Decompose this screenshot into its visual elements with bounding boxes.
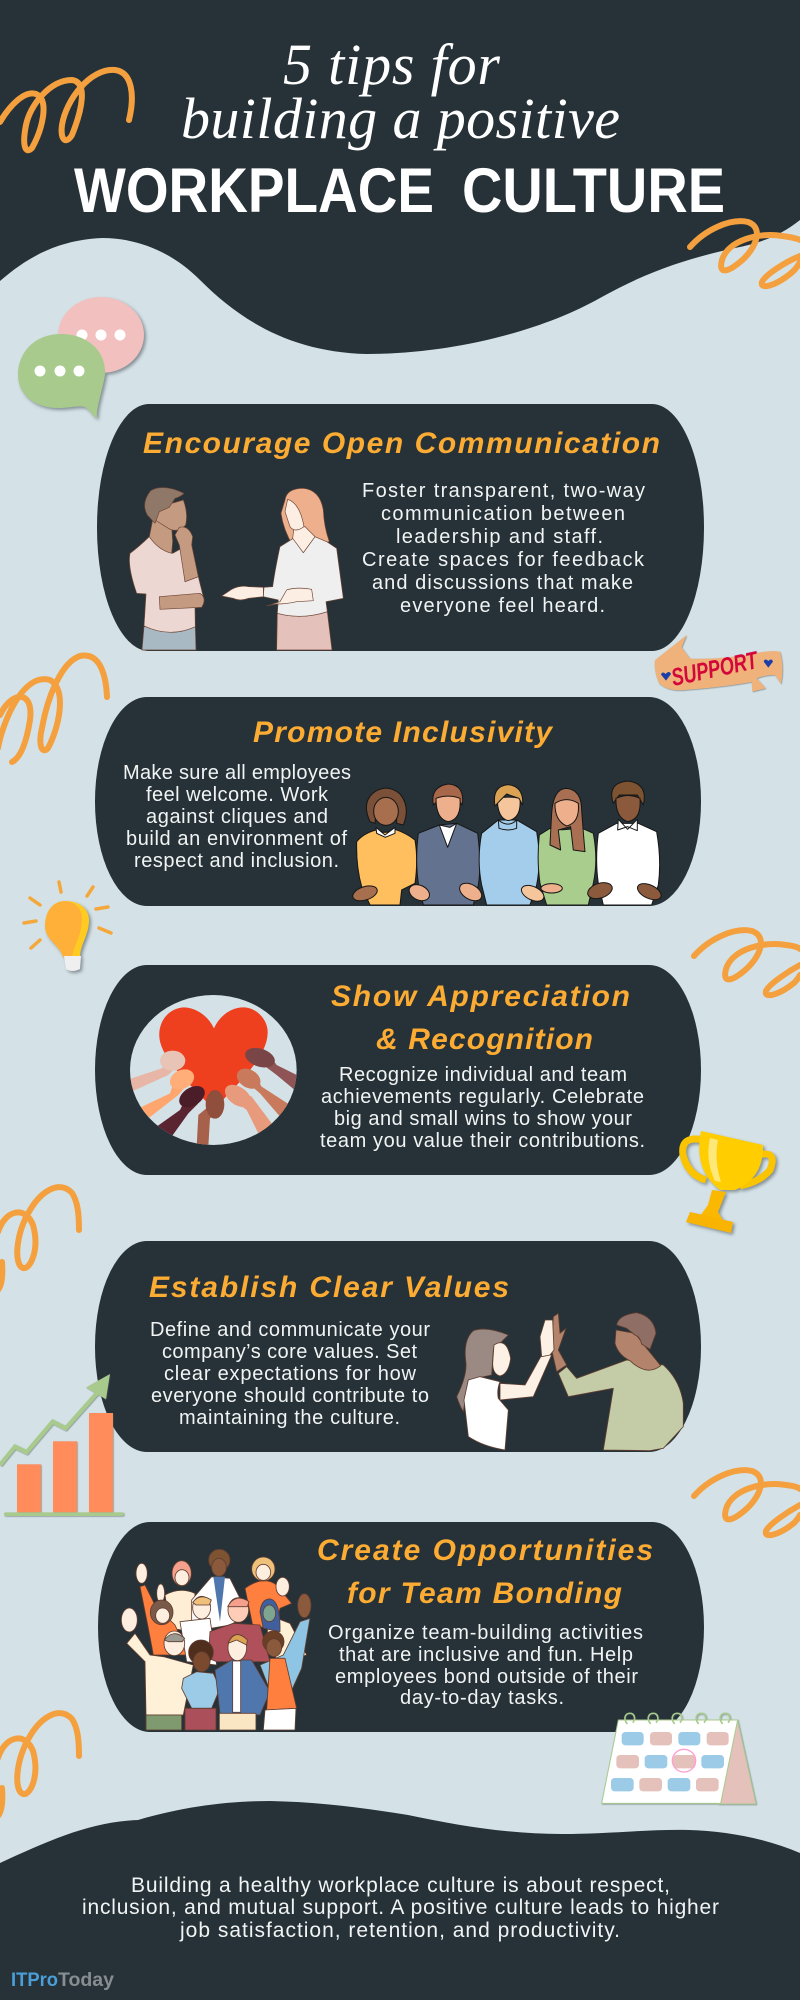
- logo: ITProToday: Today: [58, 1970, 114, 1991]
- panel: establish clear values: [95, 1241, 701, 1452]
- icon: speech bubbles: [18, 297, 144, 418]
- body text: against cliques and: [146, 806, 328, 828]
- squiggle left bottom: [0, 1713, 79, 1816]
- illustration: two people talking: [129, 488, 343, 650]
- body text: Create spaces for feedback: [362, 549, 645, 571]
- squiggle right upper: [694, 930, 800, 995]
- body text: everyone should contribute to: [151, 1385, 429, 1407]
- logo: ITProToday: ITPro: [11, 1970, 58, 1991]
- heading: Promote Inclusivity: [253, 716, 553, 749]
- icon: calendar: [602, 1713, 756, 1804]
- title: WORKPLACE: [74, 156, 434, 226]
- title: CULTURE: [462, 156, 725, 226]
- body text: [320, 1064, 645, 1152]
- heading: Show Appreciation: [331, 980, 630, 1013]
- closing text: job satisfaction, retention, and productivity.: [179, 1919, 620, 1942]
- body text: day-to-day tasks.: [400, 1687, 564, 1709]
- panel: promote inclusivity: [95, 697, 701, 906]
- illustration: team group: [121, 1549, 311, 1730]
- body text: employees bond outside of their: [335, 1666, 638, 1688]
- heading: Encourage Open Communication: [143, 427, 660, 460]
- body text: Foster transparent, two-way: [362, 480, 645, 502]
- body text: company’s core values. Set: [162, 1341, 417, 1363]
- bar chart icon with growth arrow: [0, 1374, 124, 1516]
- closing text: [82, 1874, 719, 1942]
- body text: Make sure all employees: [123, 762, 351, 784]
- panel: encourage open communication: [97, 404, 704, 651]
- illustration: hands holding heart: [127, 995, 300, 1147]
- title: [74, 32, 725, 226]
- body text: [328, 1622, 643, 1709]
- heading: [317, 1534, 653, 1610]
- squiggle top left: [0, 70, 132, 150]
- body text: [123, 762, 351, 872]
- body text: maintaining the culture.: [179, 1407, 400, 1429]
- heading: Establish Clear Values: [149, 1271, 509, 1304]
- body text: [362, 480, 645, 617]
- icon: trophy: [683, 1131, 772, 1233]
- body text: everyone feel heard.: [400, 595, 605, 617]
- heading: [331, 980, 630, 1056]
- body text: communication between: [381, 503, 625, 525]
- body text: Organize team-building activities: [328, 1622, 643, 1644]
- squiggle right lower: [694, 1470, 800, 1535]
- title: building a positive: [181, 86, 620, 151]
- body text: [150, 1319, 430, 1429]
- header background wave: [0, 0, 800, 354]
- body text: build an environment of: [126, 828, 347, 850]
- panel: show appreciation and recognition: [95, 965, 701, 1175]
- heading: Create Opportunities: [317, 1534, 653, 1567]
- body text: feel welcome. Work: [146, 784, 329, 806]
- icon: light bulb: [24, 882, 111, 971]
- body text: clear expectations for how: [164, 1363, 417, 1385]
- closing text: Building a healthy workplace culture is about respect,: [131, 1874, 670, 1897]
- illustration: high five: [457, 1313, 683, 1451]
- heading: & Recognition: [376, 1023, 593, 1056]
- squiggle left lower: [0, 1187, 79, 1290]
- body text: achievements regularly. Celebrate: [321, 1086, 644, 1108]
- body text: Recognize individual and team: [339, 1064, 627, 1086]
- closing text: inclusion, and mutual support. A positive culture leads to higher: [82, 1896, 719, 1919]
- panel: create opportunities for team bonding: [98, 1522, 704, 1732]
- body text: big and small wins to show your: [334, 1108, 632, 1130]
- icon: support banner: SUPPORT: [669, 647, 761, 692]
- body text: team you value their contributions.: [320, 1130, 645, 1152]
- body text: leadership and staff.: [396, 526, 603, 548]
- body text: Define and communicate your: [150, 1319, 430, 1341]
- illustration: five colleagues: [351, 781, 664, 905]
- body text: and discussions that make: [372, 572, 633, 594]
- title: 5 tips for: [283, 32, 500, 97]
- body text: that are inclusive and fun. Help: [339, 1644, 633, 1666]
- body text: respect and inclusion.: [134, 850, 339, 872]
- logo: ITProToday: [11, 1970, 114, 1991]
- footer background wave: [0, 1801, 800, 2000]
- heading: for Team Bonding: [347, 1577, 622, 1610]
- squiggle left middle: [0, 656, 107, 762]
- squiggle top right: [690, 221, 800, 286]
